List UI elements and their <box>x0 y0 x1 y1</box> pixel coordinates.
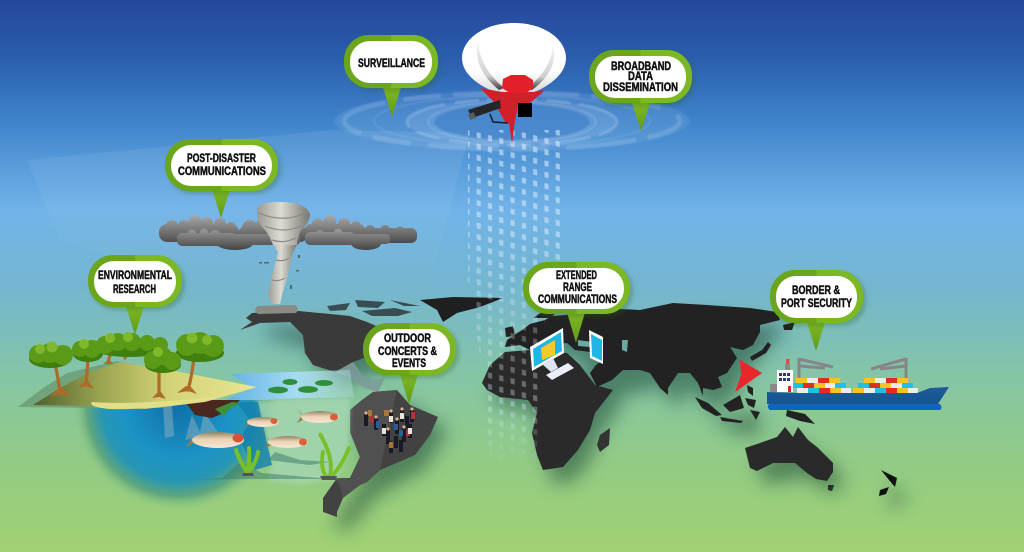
South America <box>323 390 438 517</box>
callout: border and port security: PORT SECURITY <box>781 298 852 310</box>
balloon envelope <box>462 23 566 93</box>
callout: broadband data dissemination: BROADBAND <box>611 61 671 73</box>
folder <box>541 340 555 360</box>
Eurasia <box>505 303 780 396</box>
world map shadow <box>262 319 907 531</box>
storm cloud with tornado <box>159 202 417 314</box>
cloud lower layer <box>177 228 390 250</box>
cave plant <box>215 402 240 416</box>
callout: border and port security: BORDER & <box>792 285 840 297</box>
inland seas <box>578 340 628 352</box>
tornado debris <box>259 255 300 289</box>
callout: post-disaster communications <box>165 139 281 218</box>
Greenland <box>420 297 503 322</box>
tablet <box>589 330 603 364</box>
world map <box>240 297 897 517</box>
lily pads <box>268 379 333 393</box>
callout: environmental research: RESEARCH <box>113 284 156 296</box>
keyboard <box>546 363 574 380</box>
translucent light panel <box>27 130 470 300</box>
cranes <box>799 358 906 379</box>
callout: surveillance <box>344 35 441 117</box>
surveillance camera <box>468 100 508 123</box>
monitor stand <box>542 358 558 372</box>
callout: broadband data dissemination: DISSEMINATION <box>603 82 678 94</box>
superstructure <box>777 370 793 392</box>
callout: environmental research <box>88 255 185 335</box>
water body <box>77 400 276 506</box>
callout: border and port security <box>770 270 866 351</box>
Arctic islands <box>327 300 420 316</box>
island ground <box>18 361 257 408</box>
seaweed <box>236 434 349 476</box>
computer and tablet icons <box>530 328 603 380</box>
containers <box>793 378 918 393</box>
North America <box>240 311 385 372</box>
radar rings <box>334 91 690 151</box>
dot grid beam <box>468 130 560 456</box>
callout: post-disaster communications: POST-DISASTER <box>187 153 257 165</box>
Southeast Asia islands <box>695 385 815 424</box>
callout: outdoor concerts and events: OUTDOOR <box>384 333 432 345</box>
UK and Scandinavia <box>505 308 560 337</box>
tree canopies <box>29 332 224 373</box>
Australia <box>745 427 834 491</box>
crowd of people <box>364 407 415 453</box>
dark cave wall <box>236 402 272 470</box>
airship <box>462 23 566 144</box>
callout: broadband data dissemination: DATA <box>628 71 653 83</box>
cloud upper layer <box>159 216 417 243</box>
callout: extended range communications: RANGE <box>563 282 592 294</box>
funnel streaks <box>259 212 308 281</box>
tornado lower funnel <box>268 245 297 304</box>
callout: extended range communications: COMMUNICATIONS <box>538 294 617 306</box>
tree roots <box>50 360 197 399</box>
South America lighter side <box>337 390 397 498</box>
envelope fins <box>477 42 504 90</box>
callout: extended range communications <box>523 262 633 343</box>
fish <box>183 408 339 448</box>
payload box <box>518 103 532 117</box>
Central America <box>335 362 385 392</box>
red gondola <box>480 88 545 144</box>
callout: environmental research: ENVIRONMENTAL <box>98 270 172 282</box>
hull <box>767 387 949 404</box>
callout: outdoor concerts and events <box>363 323 459 404</box>
Madagascar <box>597 428 610 452</box>
Africa <box>482 350 613 470</box>
red arrow marker <box>735 360 762 392</box>
underwater scene <box>77 370 354 506</box>
pale water at right <box>256 398 350 484</box>
tornado upper funnel <box>257 202 310 245</box>
callout: surveillance: SURVEILLANCE <box>358 58 425 70</box>
seaweed bases <box>242 473 337 480</box>
tornado base cloud <box>255 305 298 314</box>
pond surface <box>225 370 354 400</box>
seabed ridge <box>190 452 330 480</box>
callout: post-disaster communications: COMMUNICATIONS <box>178 166 266 178</box>
callout: outdoor concerts and events: EVENTS <box>392 358 426 370</box>
callout: outdoor concerts and events: CONCERTS & <box>378 346 437 358</box>
tree trunks <box>55 352 194 395</box>
container ship <box>767 358 949 410</box>
island with trees <box>18 332 257 409</box>
New Zealand <box>879 470 897 496</box>
Japan <box>750 322 795 361</box>
callout: broadband data dissemination <box>589 50 695 131</box>
monitor <box>530 328 564 371</box>
cave rocks <box>163 405 218 440</box>
callout: extended range communications: EXTENDED <box>556 270 597 282</box>
